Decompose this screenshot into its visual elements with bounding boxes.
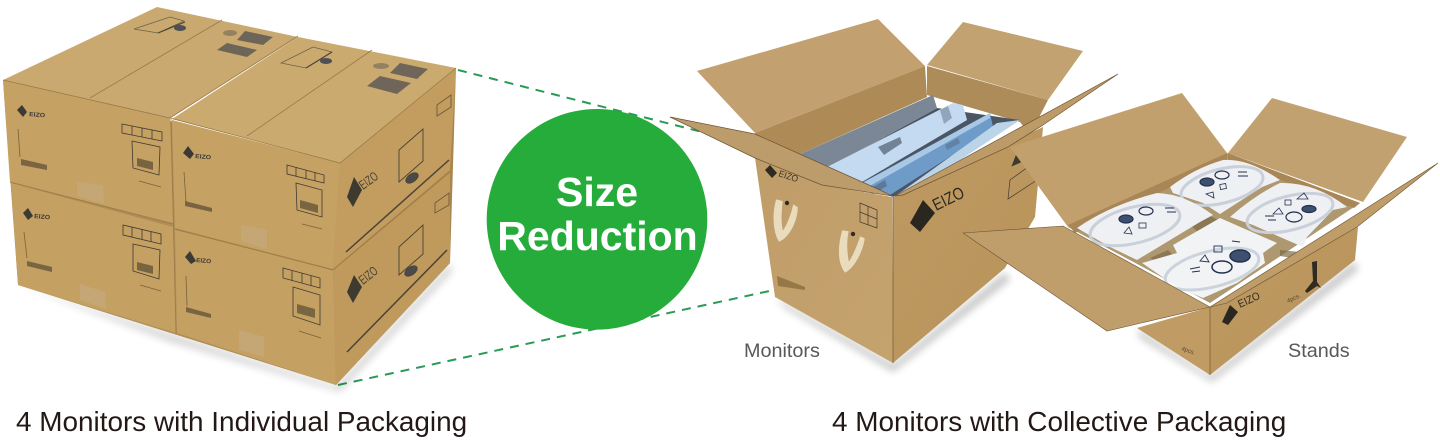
back left flap	[1010, 93, 1227, 227]
back right flap	[1228, 98, 1407, 202]
badge text: Reduction: Reduction	[497, 213, 698, 259]
EIZO logo: stand carton: EIZO	[1236, 290, 1262, 311]
blue monitor	[862, 113, 993, 195]
top carton print blocks	[217, 30, 428, 94]
pcs label left: 4pcs.	[1180, 346, 1196, 357]
upper right box front	[172, 120, 340, 269]
side bands	[346, 160, 449, 352]
seams	[3, 20, 456, 333]
upper left box front	[3, 80, 173, 223]
bag right icons	[1265, 193, 1316, 222]
label: Monitors: Monitors	[744, 340, 820, 362]
monitor carton	[670, 19, 1118, 372]
front left flap	[963, 226, 1210, 331]
light blue monitor	[825, 103, 967, 182]
bag left ring	[1086, 196, 1184, 254]
EIZO logo: upper right: EIZO	[195, 154, 212, 161]
EIZO logo: lower right: EIZO	[196, 258, 212, 265]
left face	[1137, 307, 1210, 375]
lower left box front	[11, 183, 176, 333]
corner edge	[892, 197, 894, 363]
green badge	[487, 109, 707, 330]
EIZO logo: upper left	[17, 105, 46, 119]
small address text marks	[21, 158, 318, 318]
bag back ring	[1177, 159, 1267, 213]
stand carton	[963, 93, 1438, 382]
EIZO logo: lower left: EIZO	[34, 214, 51, 221]
pulp shadows	[1150, 188, 1300, 262]
handle hole left	[785, 201, 789, 205]
warning triangle and label box	[1008, 153, 1037, 199]
pale monitor	[897, 120, 1020, 197]
EIZO logo: carton right	[910, 183, 967, 232]
top face left box	[3, 7, 298, 118]
top monitor prints	[134, 17, 332, 68]
carton shadow	[1137, 261, 1358, 382]
right face	[1210, 227, 1358, 375]
EIZO logo: carton left	[765, 165, 799, 184]
gray monitor	[798, 95, 937, 167]
EIZO logo: carton left: EIZO	[777, 168, 799, 184]
bag front	[1142, 218, 1277, 298]
monitor wrap text marks	[868, 106, 960, 195]
handle right	[839, 230, 865, 273]
upper right side	[333, 68, 456, 269]
top face right box	[172, 37, 456, 163]
bag left icons	[1119, 207, 1176, 234]
dashed connector: top	[458, 70, 706, 133]
blue monitor highlight	[862, 113, 990, 187]
side monitor prints	[399, 95, 451, 278]
carton shadow	[775, 272, 1010, 372]
stack shadow	[18, 263, 452, 392]
EIZO logo: carton right: EIZO	[929, 183, 967, 215]
inner rim right	[1228, 153, 1360, 208]
EIZO logo: upper left: EIZO	[29, 112, 46, 119]
inner rim	[1068, 153, 1227, 233]
EIZO logo: lower right	[185, 251, 212, 265]
bag right	[1230, 183, 1347, 247]
inner wall right	[927, 66, 1048, 135]
stand icon	[1305, 261, 1321, 293]
bag back	[1170, 159, 1280, 214]
front right flap	[895, 74, 1118, 196]
circle	[487, 109, 707, 330]
bag back icons	[1200, 171, 1248, 198]
EIZO logo: upper right	[183, 146, 212, 161]
interior tray	[1068, 153, 1360, 303]
corner edge	[1209, 307, 1211, 375]
stacked individual boxes	[3, 7, 456, 392]
bag front icons	[1190, 241, 1250, 273]
handling symbols and address boxes	[18, 124, 324, 338]
tape patches	[77, 182, 267, 357]
badge text: Size: Size	[556, 169, 638, 215]
stack side base	[336, 68, 456, 385]
back right flap	[927, 22, 1083, 100]
side EIZO mark: upper	[347, 169, 381, 207]
bag left	[1077, 193, 1213, 260]
right flap	[1210, 163, 1438, 307]
lower right box front	[175, 230, 336, 385]
EIZO logo: stand carton	[1222, 290, 1262, 325]
handle hole right	[851, 232, 855, 236]
right face	[893, 127, 1043, 363]
bag front ring	[1161, 240, 1263, 298]
label: Stands: Stands	[1288, 340, 1350, 362]
inner floor	[830, 108, 1020, 197]
inner wall left	[755, 66, 927, 165]
caption: individual packaging: 4 Monitors with Individual Packaging	[16, 406, 467, 437]
stack base	[3, 80, 340, 385]
side EIZO mark: lower	[347, 263, 381, 303]
dashed connector: bottom	[338, 290, 774, 385]
EIZO logo: lower left	[23, 208, 51, 221]
left face	[755, 158, 893, 363]
front left flap	[670, 117, 892, 196]
side EIZO mark: lower: EIZO	[356, 263, 381, 287]
bag right ring	[1243, 186, 1337, 240]
lower right side	[333, 172, 450, 385]
side EIZO mark: upper: EIZO	[356, 169, 381, 192]
carton print lines	[777, 276, 805, 290]
caption: collective packaging: 4 Monitors with Collective Packaging	[832, 406, 1286, 437]
handling symbols	[860, 203, 877, 228]
back left flap	[697, 19, 925, 133]
handle left	[773, 199, 798, 242]
pcs label right: 4pcs.	[1286, 293, 1302, 305]
